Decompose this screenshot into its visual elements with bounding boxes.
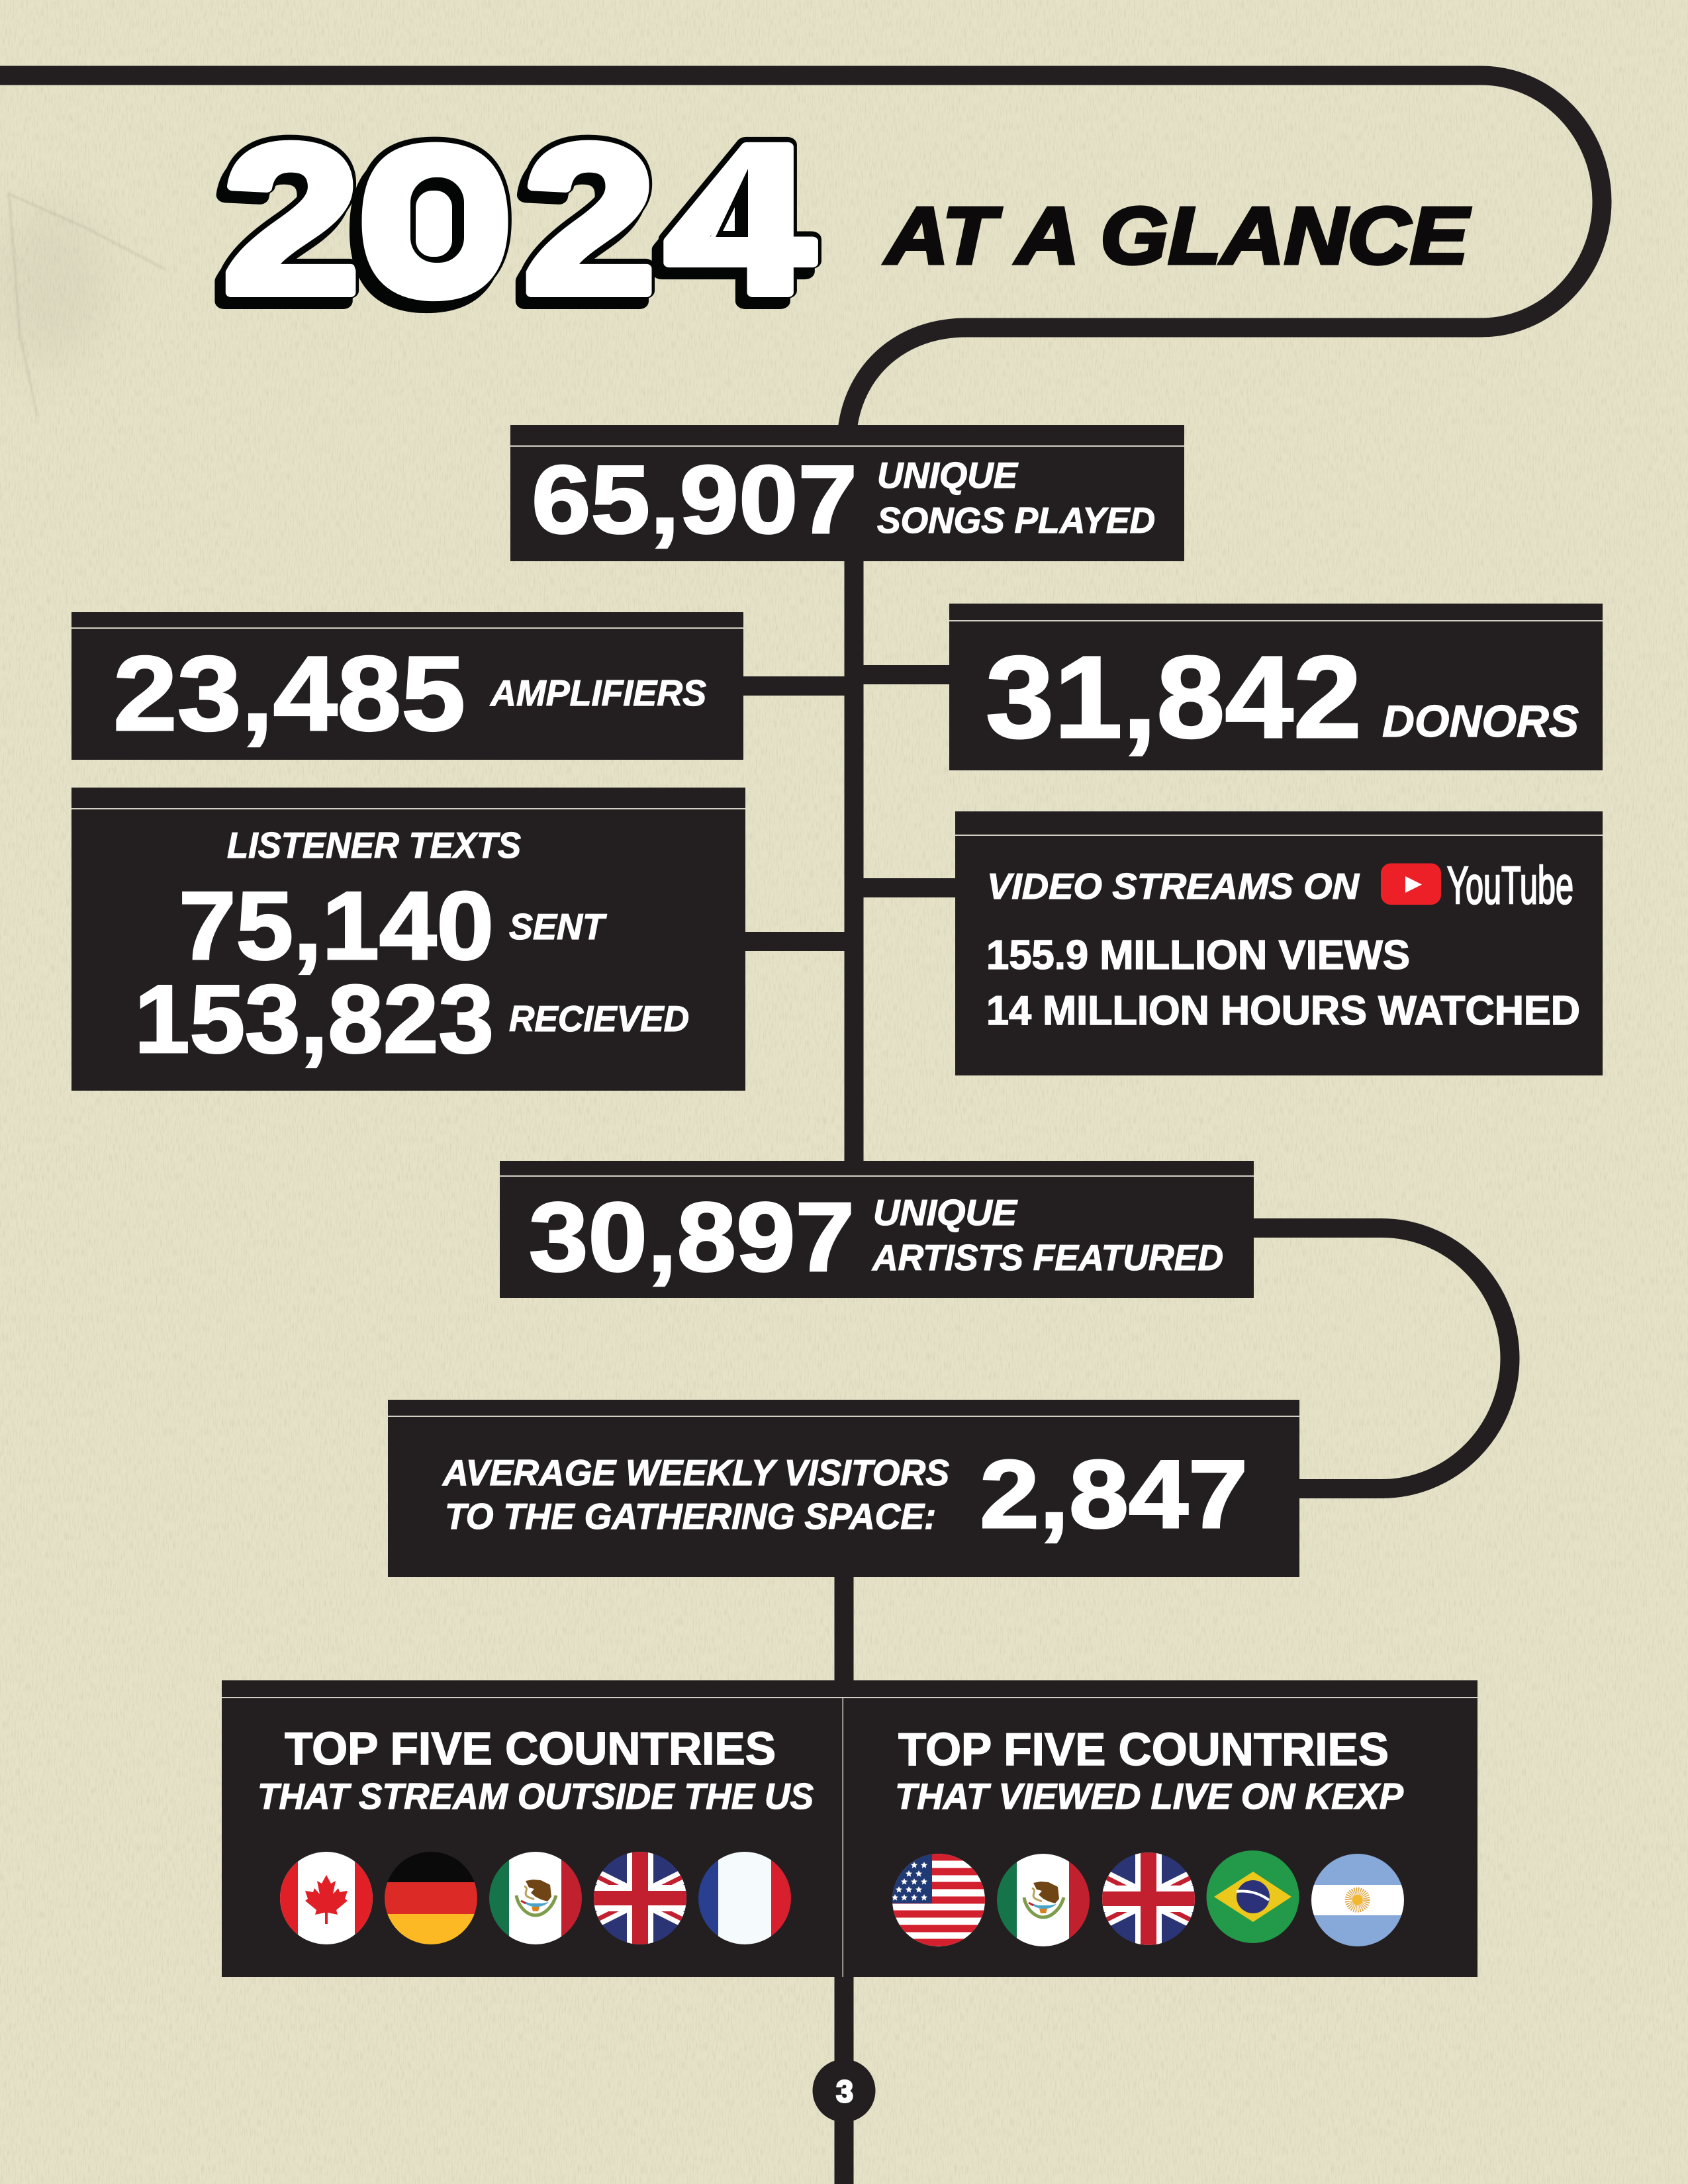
panel: video streams on youtube (955, 811, 1603, 1075)
panel: video streams on youtube: VIDEO STREAMS ON (987, 866, 1360, 907)
icon: mexico flag second (997, 1854, 1090, 1946)
panel: average weekly visitors: TO THE GATHERING SPACE: (445, 1496, 936, 1537)
panel: listener texts: 75,140 (179, 872, 494, 979)
panel: donors (949, 604, 1603, 770)
panel: amplifiers: AMPLIFIERS (489, 672, 706, 713)
page number: 3 (836, 2074, 853, 2109)
heading: top five countries that stream outside the us: THAT STREAM OUTSIDE THE US (258, 1776, 814, 1817)
panel: average weekly visitors (388, 1400, 1299, 1577)
heading: top five countries that stream outside the us (258, 1723, 814, 1817)
panel: top five countries (222, 1680, 1477, 1977)
icon: united kingdom flag (594, 1852, 686, 1944)
icon: united kingdom flag second (1056, 1852, 1241, 1945)
heading: top five countries that stream outside the us: TOP FIVE COUNTRIES (285, 1723, 776, 1774)
panel: unique songs played: 65,907 (532, 445, 857, 553)
icon: france flag (698, 1852, 791, 1944)
panel: unique artists featured (500, 1161, 1254, 1298)
icon: argentina flag (1311, 1854, 1404, 1946)
icon: united states flag (892, 1854, 985, 1946)
title: 2024: 0 (356, 101, 512, 338)
panel: donors: 31,842 (986, 633, 1362, 762)
icon: youtube logo: YouTube (1447, 856, 1573, 915)
heading: top five countries that viewed live on kexp (895, 1723, 1403, 1817)
icon: germany flag (385, 1852, 477, 1944)
panel: video streams on youtube: 155.9 MILLION VIEWS (986, 933, 1410, 978)
panel: unique songs played: UNIQUE (877, 455, 1019, 496)
title: 2024: 2 (222, 101, 360, 338)
panel: amplifiers: 23,485 (113, 634, 465, 752)
heading: top five countries that viewed live on kexp: TOP FIVE COUNTRIES (898, 1723, 1389, 1775)
panel: unique artists featured: ARTISTS FEATURED (871, 1237, 1223, 1278)
icon: canada flag (280, 1852, 373, 1944)
title: 2024: 2 (215, 110, 353, 346)
title: 2024: 2 (222, 99, 359, 336)
panel: listener texts: SENT (509, 906, 607, 947)
title: 2024: 0 (357, 103, 514, 340)
panel: listener texts (71, 788, 745, 1091)
panel: unique artists featured: 30,897 (529, 1183, 855, 1292)
page number (813, 2060, 875, 2122)
icon: youtube logo (1381, 856, 1573, 915)
panel: unique songs played (510, 425, 1184, 561)
title: 2024: 2 (522, 99, 655, 336)
panel: average weekly visitors: AVERAGE WEEKLY VISITORS (442, 1452, 949, 1493)
panel: listener texts: RECIEVED (509, 998, 689, 1039)
panel: listener texts: 153,823 (134, 965, 494, 1073)
heading: top five countries that viewed live on kexp: THAT VIEWED LIVE ON KEXP (895, 1776, 1403, 1817)
title: at a glance: AT A GLANCE (884, 191, 1471, 281)
panel: unique songs played: SONGS PLAYED (877, 500, 1155, 541)
counter of the zero (405, 167, 469, 273)
title: 2024: 2 (516, 110, 649, 346)
icon: mexico flag (489, 1852, 582, 1944)
title: 2024: 0 (349, 111, 506, 348)
panel: donors: DONORS (1382, 696, 1579, 747)
title: 2024: 4 (665, 101, 816, 338)
icon: brazil flag (1206, 1850, 1299, 1943)
panel: amplifiers (71, 612, 743, 760)
panel: unique artists featured: UNIQUE (873, 1192, 1018, 1233)
title: 2024 (215, 99, 816, 348)
title: 2024: 4 (658, 110, 808, 347)
title: 2024: 2 (523, 101, 656, 338)
panel: listener texts: LISTENER TEXTS (227, 825, 521, 866)
panel: video streams on youtube: 14 MILLION HOURS WATCHED (986, 988, 1580, 1034)
counter of the four (706, 159, 751, 246)
panel: average weekly visitors: 2,847 (980, 1440, 1248, 1548)
title: 2024: 4 (665, 99, 815, 336)
